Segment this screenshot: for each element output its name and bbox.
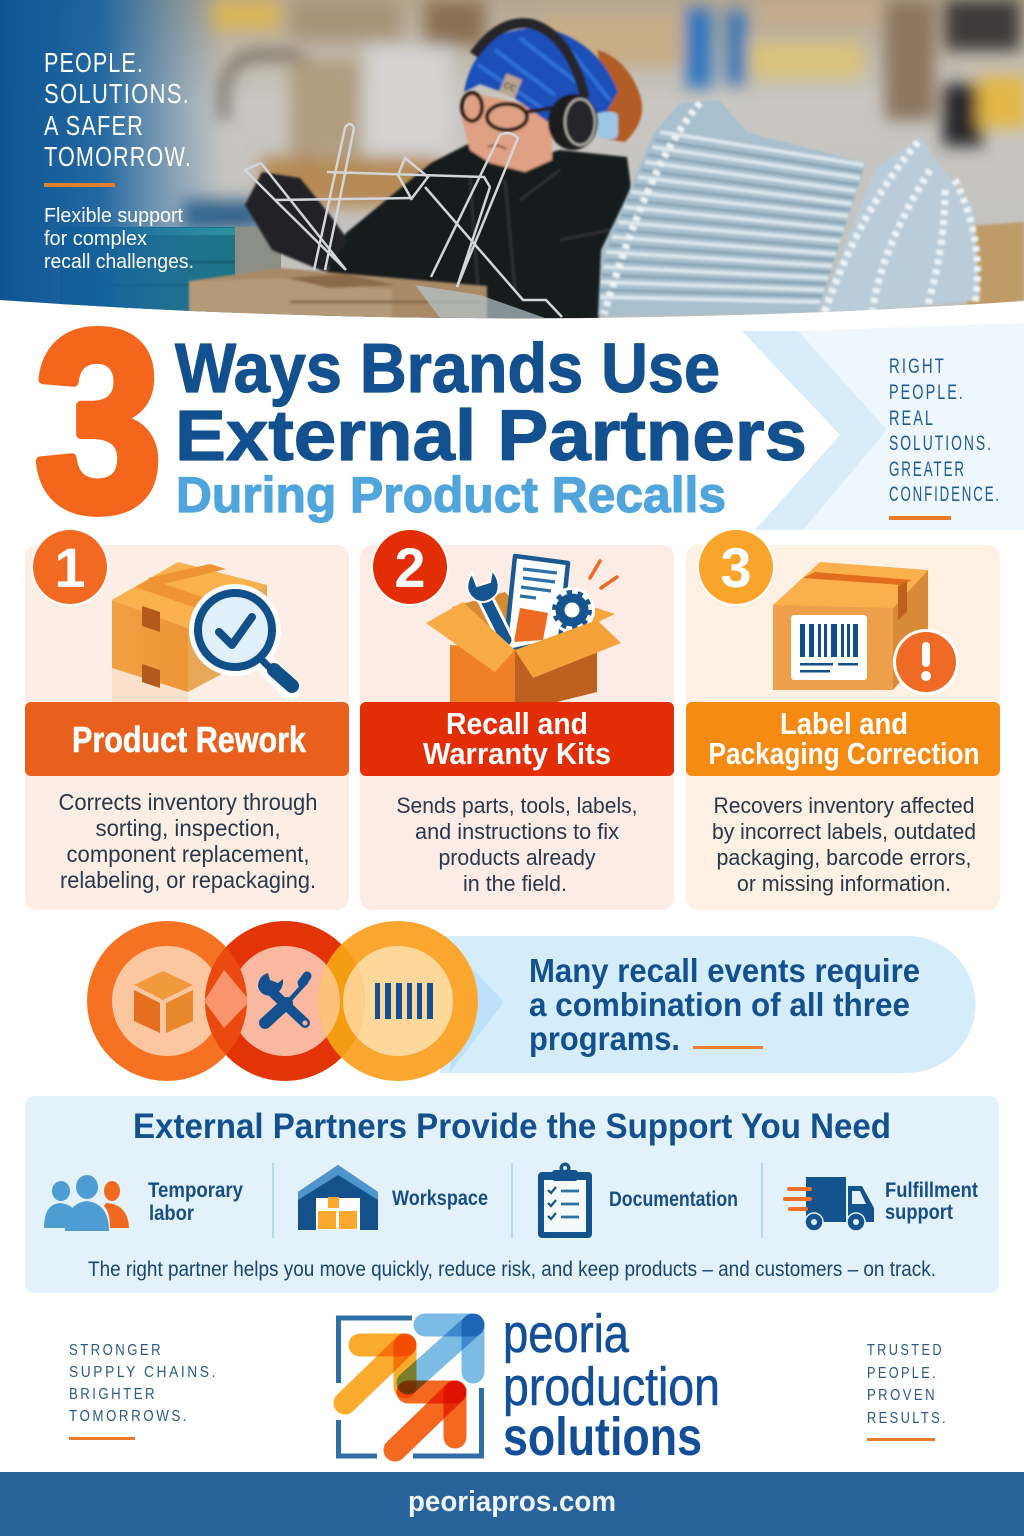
hero headline: TOMORROW. [44,141,192,172]
circle: box [87,921,247,1081]
panel: partner support [25,1096,999,1293]
support item: documentation: Documentation [609,1188,738,1211]
footer slogan left: BRIGHTER [69,1386,157,1403]
footer slogan left: STRONGER [69,1342,163,1359]
description [396,793,638,896]
beanie [464,28,618,122]
panel: product rework [25,528,349,910]
icon: box with barcode label and warning [773,562,959,695]
logo mark [338,1318,482,1456]
support item: workspace: Workspace [392,1187,488,1210]
heading band: Label and [780,706,908,741]
support item: documentation [538,1162,738,1238]
description: packaging, barcode errors, [716,845,972,870]
wooden crate [189,268,487,320]
description: in the field. [463,871,567,896]
glasses [462,93,552,130]
number badge 3 [697,528,775,606]
banner slogan: GREATER [889,458,966,481]
footer slogan right: PEOPLE. [867,1365,938,1382]
wire hangers [245,124,562,317]
callout text [529,952,920,1057]
heading band: Product Rework [72,719,307,760]
banner slogan [889,355,1001,506]
face [462,92,552,172]
website band: peoriapros.com [408,1486,616,1518]
footer slogan left: SUPPLY CHAINS. [69,1364,218,1381]
panel: label and packaging correction [686,528,1000,910]
icon: box with magnifier [112,562,292,702]
hero headline: SOLUTIONS. [44,78,190,109]
logo wordmark: peoria [503,1304,630,1364]
worker: CC [502,80,519,94]
cardboard box right [967,222,1024,310]
combination callout [87,921,976,1081]
description: Recovers inventory affected [714,793,974,818]
title [175,329,807,523]
description: and instructions to fix [415,819,619,844]
circle: barcode [318,921,478,1081]
footer slogan left [69,1342,218,1440]
callout text: Many recall events require [529,952,920,989]
footer slogan right [867,1342,948,1441]
banner slogan: RIGHT [889,355,946,378]
icon: open box with tools [426,556,621,702]
callout text: a combination of all three [529,986,910,1023]
box back flaps [452,592,530,650]
title: Ways Brands Use [175,329,720,407]
support heading: External Partners Provide the Support You Need [133,1107,891,1146]
callout accent rule [693,1046,763,1049]
hero photo: worker sorting wire hangers [0,0,1024,340]
heading band [686,702,1000,776]
support item: fulfillment support: Fulfillment [885,1179,978,1202]
headphones [474,23,585,98]
stack of wire coils [598,100,980,316]
logo wordmark: solutions [503,1407,702,1467]
number badge 1 [31,528,109,606]
wrench [467,570,506,640]
heading band [25,702,349,776]
footer slogan right: TRUSTED [867,1342,944,1359]
description [712,793,976,896]
support item: temporary labor: Temporary [148,1179,243,1202]
hero headline [44,47,192,172]
number badge 2: 2 [394,536,426,599]
number badge 2 [371,528,449,606]
footer slogan right: RESULTS. [867,1410,948,1427]
heading band: Warranty Kits [423,736,611,771]
heading band: Recall and [446,706,588,741]
description: sorting, inspection, [96,815,280,841]
description: or missing information. [737,871,951,896]
arrow [450,950,504,1072]
banner slogan: REAL [889,407,935,430]
hero subtext: for complex [44,228,147,250]
callout text: programs. [529,1020,680,1057]
hero headline: A SAFER [44,110,144,141]
wrench [270,990,305,1023]
title: External Partners [175,397,807,476]
teal crate [60,227,281,317]
logo wordmark [503,1304,720,1467]
description: by incorrect labels, outdated [712,819,976,844]
hair [598,50,642,142]
footer slogan right: PROVEN [867,1387,937,1404]
logo wordmark: production [503,1357,720,1417]
title: During Product Recalls [176,467,726,523]
number badge 3: 3 [720,536,752,599]
website band [0,1472,1024,1536]
banner accent rule [889,516,951,520]
screwdriver [265,1003,287,1023]
hero subtext [44,205,194,273]
worker [245,23,642,320]
document [505,556,568,652]
glove [245,172,348,272]
callout pill [440,936,976,1073]
description: Sends parts, tools, labels, [396,793,638,818]
blue gradient overlay [0,0,225,320]
description: Corrects inventory through [58,789,318,815]
hero subtext: Flexible support [44,205,183,227]
footer slogan left: TOMORROWS. [69,1408,189,1425]
heading band: Packaging Correction [708,736,980,771]
support item: temporary labor: labor [149,1202,194,1225]
hero headline: PEOPLE. [44,47,144,78]
support item: fulfillment support: support [885,1201,953,1224]
gear [549,587,595,633]
support item: fulfillment support [785,1177,978,1231]
description: relabeling, or repackaging. [60,867,316,893]
description [58,789,318,893]
number badge 1: 1 [54,536,86,599]
box body [450,645,515,702]
chevron banner [742,323,1024,530]
heading band [360,702,674,776]
banner slogan: PEOPLE. [889,381,965,404]
description: component replacement, [66,841,310,867]
linked circles [87,921,478,1081]
support item: workspace [298,1165,488,1230]
description: products already [438,845,596,870]
circle: tools [204,921,342,1081]
panel: recall and warranty kits [360,528,674,910]
hero subtext: recall challenges. [44,251,194,273]
big numeral 3: 3 [35,279,162,564]
hero accent rule [44,183,115,187]
support item: temporary labor [44,1175,243,1231]
support note: The right partner helps you move quickly, reduce risk, and keep products – and customers – on track. [88,1258,936,1281]
jacket [320,143,632,320]
